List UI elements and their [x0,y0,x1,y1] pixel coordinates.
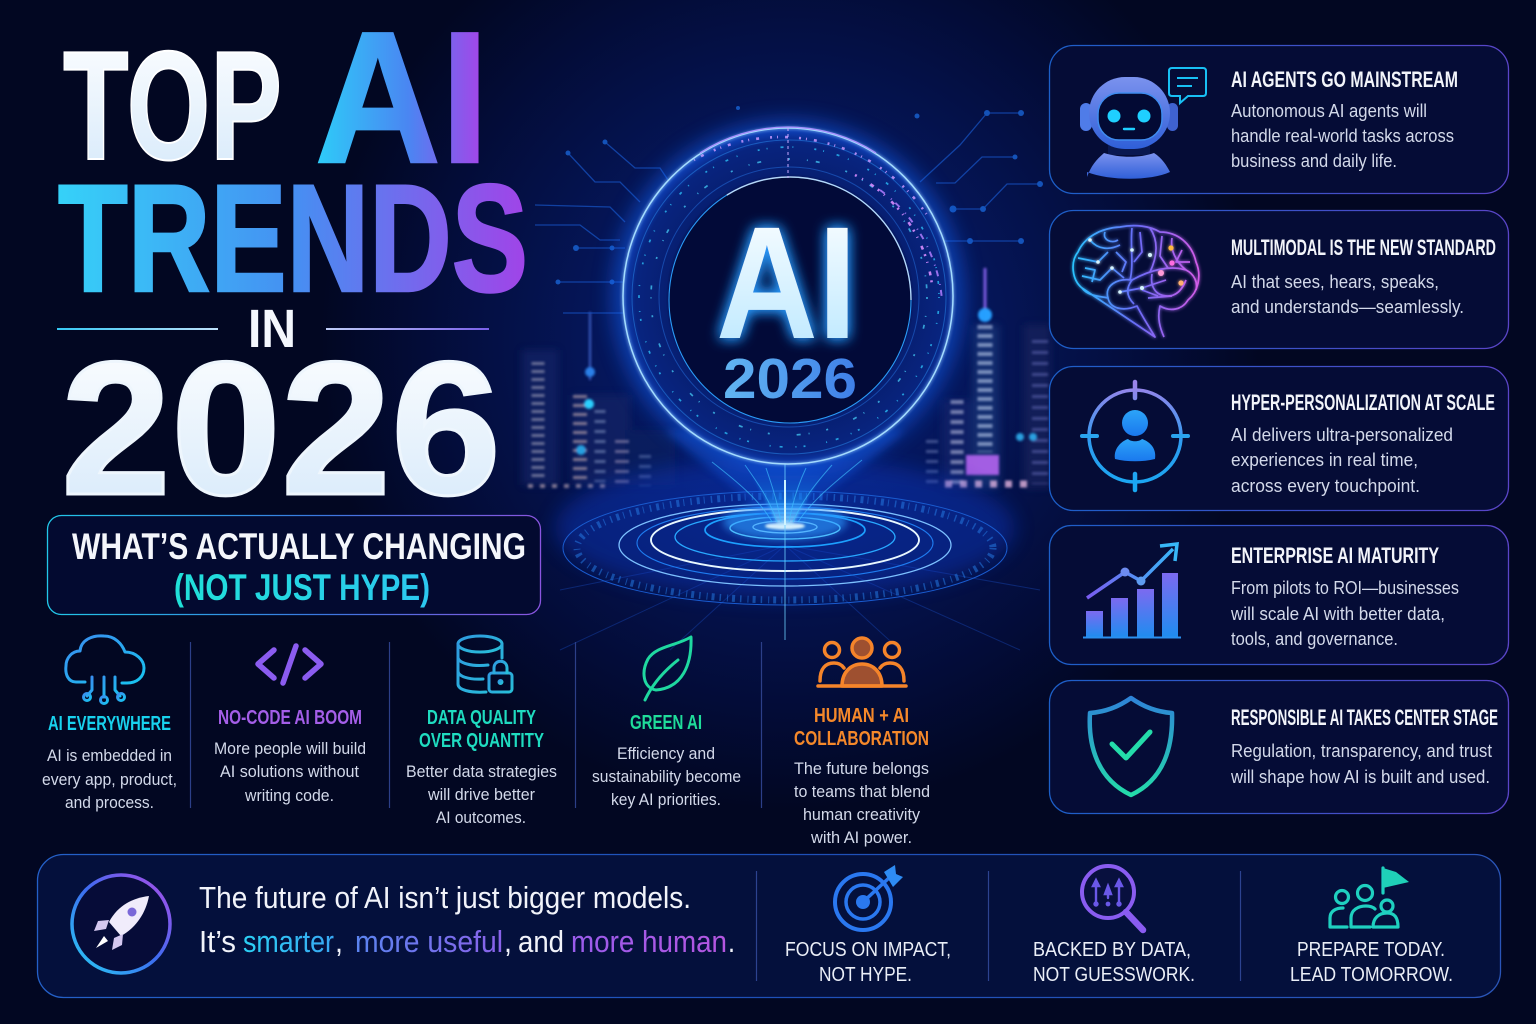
card: responsible AI [1050,680,1508,814]
holographic platform rings [563,491,1007,605]
background central glow [300,0,1260,860]
orb rim [623,128,953,464]
card: multimodal [1050,210,1508,348]
takeaway: focus on impact [785,865,951,986]
icon: magnifier with data [1082,866,1143,930]
icon: team with flag [1330,868,1409,927]
description: Better data strategies [406,762,557,781]
description: AI solutions without [220,762,359,781]
description: Efficiency and [617,744,715,763]
closing statement: . [728,924,735,959]
orb AI label: AI [716,193,857,372]
takeaway: prepare today [1290,868,1453,986]
card text: From pilots to ROI—businesses [1231,578,1459,598]
card text: business and daily life. [1231,151,1397,171]
title line TOP: TOP [63,19,282,192]
trend column: no-code AI boom [214,646,366,805]
description: will drive better [427,785,535,804]
closing statement: more human [571,924,727,959]
heading [419,707,545,752]
rule left [57,328,218,330]
title line IN: IN [248,299,296,359]
card text: will shape how AI is built and used. [1230,767,1490,787]
description: and process. [65,793,154,812]
icon: rocket badge [72,875,170,973]
card: enterprise AI maturity [1050,526,1508,664]
description: AI is embedded in [47,746,172,765]
description [794,759,930,847]
floor glow pool [555,458,1015,598]
takeaway text [1290,939,1453,986]
closing statement: and [518,924,564,959]
card text: tools, and governance. [1231,629,1398,649]
takeaway text: NOT HYPE. [819,964,912,986]
closing statement: more useful [355,924,503,959]
circuit lines around the orb [535,106,1043,313]
rule right [326,328,489,330]
bottom banner [38,854,1500,998]
trend column: AI everywhere [42,636,177,812]
description: to teams that blend [794,782,930,801]
card text: AI delivers ultra-personalized [1231,425,1453,445]
takeaway text [785,939,951,986]
heading: HUMAN + AI [814,705,909,727]
orb year label: 2026 [723,347,857,411]
description [214,739,366,805]
icon: shield check [1090,698,1172,795]
heading [794,705,929,750]
description [42,746,177,812]
icon: target person [1082,382,1188,490]
icon: code brackets [258,646,321,683]
blurred city skyline [522,268,1050,488]
heading: COLLABORATION [794,728,929,750]
light beam rising from platform [665,400,905,640]
icon: cloud circuit [66,636,144,704]
description [406,762,557,827]
heading: OVER QUANTITY [419,730,545,752]
card text [1230,578,1459,649]
trend column: data quality [406,636,557,827]
trend column: green AI [592,637,741,809]
description: human creativity [803,805,920,824]
icon: database with lock [458,636,512,692]
heading: DATA QUALITY [427,707,536,729]
card text: Autonomous AI agents will [1231,101,1427,121]
card text [1231,425,1453,496]
card text: AI that sees, hears, speaks, [1231,272,1439,292]
takeaway text: NOT GUESSWORK. [1033,964,1195,986]
icon: growth bar chart [1083,544,1181,638]
AI orb [623,127,953,464]
closing statement: smarter [243,924,334,959]
column dividers [190,642,762,808]
description: sustainability become [592,767,741,786]
card text: and understands—seamlessly. [1231,297,1464,317]
card text: handle real-world tasks across [1231,126,1454,146]
description: The future belongs [794,759,929,778]
trend column: human + AI [794,638,930,847]
subtitle line 1: WHAT’S ACTUALLY CHANGING [72,526,526,567]
card text: will scale AI with better data, [1230,604,1445,624]
floor perspective grid [560,545,1040,650]
icon: robot [1080,68,1206,179]
takeaway text: FOCUS ON IMPACT, [785,939,951,961]
closing statement: It’s [199,924,236,959]
icon: leaf [644,637,691,700]
description [592,744,741,809]
orb inner disc [669,177,911,423]
title [57,0,528,535]
takeaway text: BACKED BY DATA, [1033,939,1191,961]
description: every app, product, [42,770,177,789]
takeaway text: LEAD TOMORROW. [1290,964,1453,986]
card text: Regulation, transparency, and trust [1231,741,1492,761]
card: hyper-personalization [1050,366,1508,510]
closing statement: The future of AI isn’t just bigger models. [199,880,691,915]
heading: GREEN AI [630,712,702,734]
icon: chat bubble [1169,68,1206,103]
description: AI outcomes. [436,808,526,827]
subtitle line 2: (NOT JUST HYPE) [174,567,430,608]
orb halo [612,120,964,472]
closing statement [199,880,735,959]
subtitle box [48,516,540,614]
card text [1231,101,1454,171]
title line TRENDS: TRENDS [58,153,528,324]
title line 2026: 2026 [61,323,501,535]
closing statement: , [504,924,512,959]
description: with AI power. [810,828,912,847]
icon: neural brain [1073,226,1199,337]
closing statement: , [335,924,343,959]
card text [1230,741,1492,787]
heading: AI EVERYWHERE [48,713,171,735]
heading: NO-CODE AI BOOM [218,707,362,729]
description: More people will build [214,739,366,758]
takeaway text: PREPARE TODAY. [1297,939,1445,961]
icon: target with arrow [835,865,903,930]
orb data rings [632,137,946,454]
card text: across every touchpoint. [1231,476,1420,496]
description: key AI priorities. [611,790,721,809]
card heading: ENTERPRISE AI MATURITY [1231,543,1439,568]
card: AI agents go mainstream [1050,46,1508,194]
icon: people group [818,638,906,686]
description: writing code. [244,786,334,805]
card text: experiences in real time, [1231,450,1418,470]
card text [1231,272,1464,317]
takeaway text [1033,939,1195,986]
takeaway: backed by data [1033,866,1195,986]
